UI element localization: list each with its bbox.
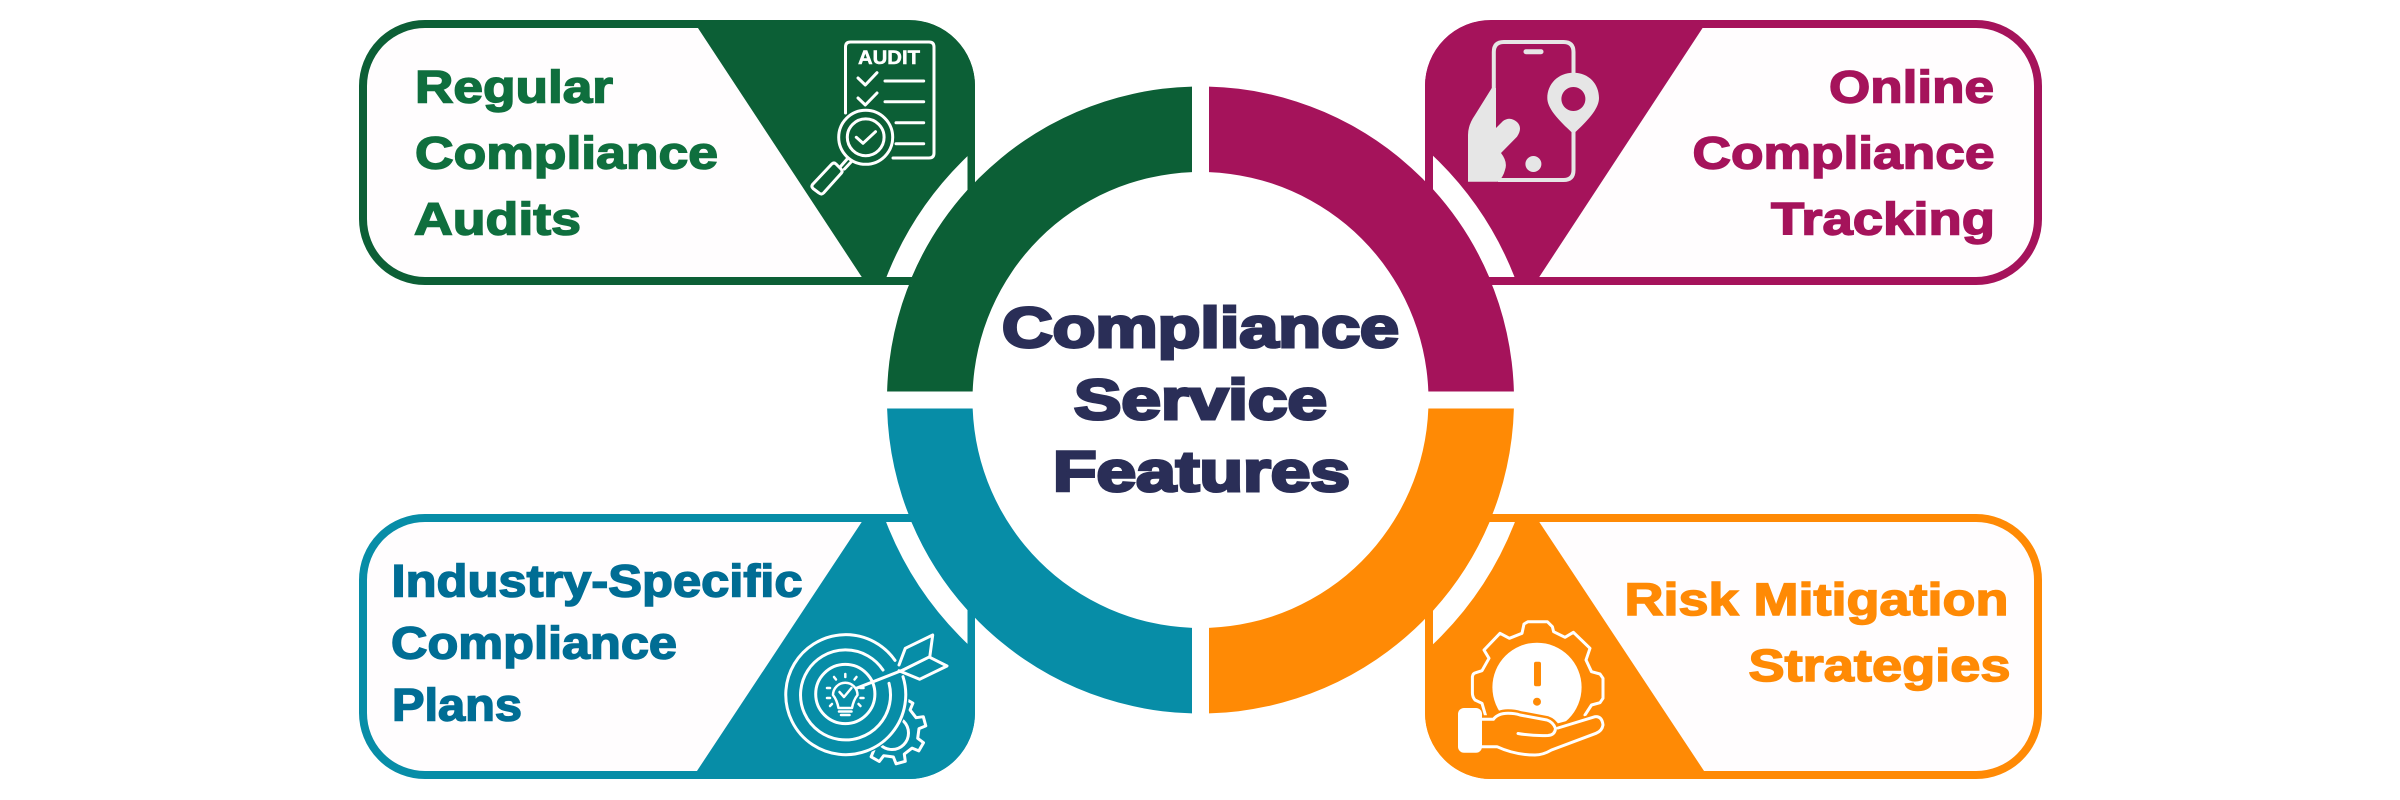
card outline xyxy=(1429,24,2038,281)
white arc gap xyxy=(1433,522,1515,644)
heading: Regular Compliance Audits xyxy=(414,62,718,244)
heading: Online Compliance Tracking: Compliance xyxy=(1692,128,1994,178)
heading: Online Compliance Tracking: Tracking xyxy=(1771,194,1995,244)
heading: Risk Mitigation Strategies xyxy=(1624,574,2010,691)
icon: gear with warning sign in open hand xyxy=(1458,622,1603,755)
ring segment: orange xyxy=(1209,408,1514,713)
title: Compliance Service Features: Compliance xyxy=(1002,296,1399,360)
heading: Regular Compliance Audits: Compliance xyxy=(415,128,718,178)
title: Compliance Service Features: Service xyxy=(1074,368,1327,432)
ring segment: magenta xyxy=(1209,87,1514,391)
heading: Industry-Specific Compliance Plans: Plans xyxy=(392,680,522,730)
icon: phone with location pin and hand xyxy=(1468,42,1599,182)
panel: Industry-Specific Compliance Plans xyxy=(359,514,975,779)
white arc gap xyxy=(886,156,968,277)
card outline xyxy=(363,24,971,281)
ring segment: green xyxy=(887,87,1192,391)
chart: central four-segment ring xyxy=(887,87,1514,713)
panel: Risk Mitigation Strategies xyxy=(1425,514,2042,779)
heading: Risk Mitigation Strategies: Risk Mitigation xyxy=(1624,574,2008,625)
heading: Regular Compliance Audits: Audits xyxy=(414,194,581,244)
card outline xyxy=(1429,518,2038,775)
coloured icon wedge xyxy=(1424,22,1706,285)
ring segment: teal xyxy=(887,408,1192,713)
heading: Industry-Specific Compliance Plans: Compliance xyxy=(391,618,677,668)
icon: audit checklist with magnifier: AUDIT xyxy=(858,48,920,69)
panel: Regular Compliance Audits xyxy=(359,20,975,285)
coloured icon wedge xyxy=(691,514,976,780)
heading: Regular Compliance Audits: Regular xyxy=(415,62,613,112)
icon: target with arrow, bulb and gear xyxy=(782,630,947,764)
heading: Risk Mitigation Strategies: Strategies xyxy=(1748,640,2010,691)
panel: Online Compliance Tracking xyxy=(1425,20,2042,285)
coloured icon wedge xyxy=(1424,514,1710,780)
icon: audit checklist with magnifier xyxy=(812,42,934,194)
heading: Online Compliance Tracking: Online xyxy=(1829,62,1994,112)
white arc gap xyxy=(1433,156,1514,277)
title: Compliance Service Features: Features xyxy=(1053,440,1350,504)
card outline xyxy=(363,518,971,775)
white arc gap xyxy=(886,522,968,644)
heading: Industry-Specific Compliance Plans xyxy=(391,556,802,730)
heading: Online Compliance Tracking xyxy=(1692,62,1995,244)
title: Compliance Service Features xyxy=(1002,296,1399,504)
heading: Industry-Specific Compliance Plans: Industry-Specific xyxy=(392,556,802,606)
coloured icon wedge xyxy=(694,22,976,285)
